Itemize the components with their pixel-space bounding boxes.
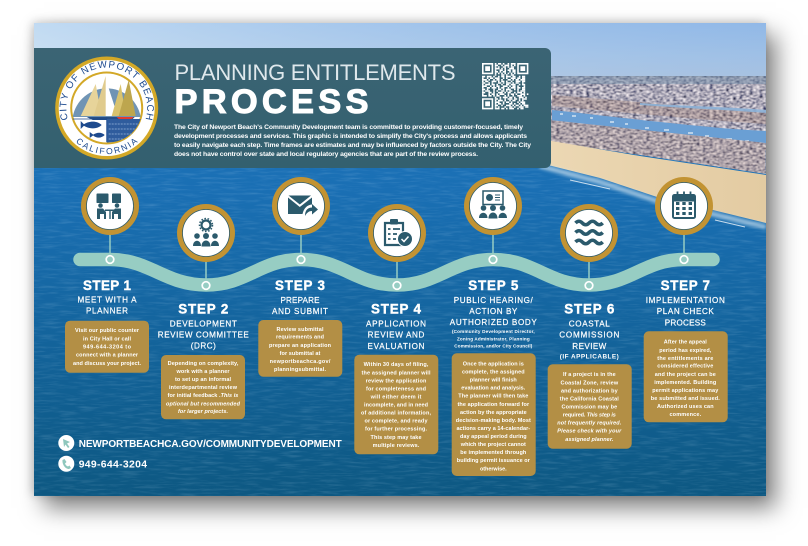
icon: calendar (672, 192, 696, 219)
step 5 description box: action by the appropriate (460, 410, 527, 416)
step 6 heading: COASTAL (569, 320, 610, 329)
step 5 description box: Once the application is (463, 362, 524, 368)
step 7 description box: commence. (669, 412, 702, 418)
step 5 description box: actions carry a 14-calendar- (456, 426, 530, 432)
header panel (34, 48, 551, 168)
step 4 description box: review the application (366, 378, 427, 384)
step 5 description box: evaluation and analysis. (461, 386, 526, 392)
background aerial photo (34, 23, 766, 496)
step 7 description box: After the appeal (664, 340, 707, 346)
step 7 description box: be submitted and issued. (651, 396, 720, 402)
step 5 heading (450, 278, 537, 349)
step 3 description box: prepare an application (269, 343, 332, 349)
website contact: NEWPORTBEACHCA.GOV/COMMUNITYDEVELOPMENT (79, 439, 342, 450)
title (174, 60, 456, 121)
step 1 description box: in City Hall or call (83, 336, 131, 342)
step 7 heading: STEP 7 (661, 278, 710, 293)
step 4 heading: APPLICATION (366, 320, 426, 329)
step 4 description box: the assigned planner will (362, 370, 431, 376)
step 3 heading: STEP 3 (275, 278, 325, 293)
title: PROCESS (174, 83, 368, 121)
step 5 description box: complete, the assigned (462, 370, 525, 376)
step 7 description box: the entitlements are (657, 356, 713, 362)
step 4 description box: will either deem it (370, 394, 422, 400)
step 4 description box: or complete, and ready (364, 418, 428, 424)
step 6 description box: not frequently required. (557, 420, 622, 426)
step 7 description box: considered effective (657, 364, 713, 370)
step 5 heading: AUTHORIZED BODY (450, 318, 537, 327)
seal lettering: CITY OF NEWPORT BEACH (60, 60, 154, 120)
step 2 description box: work with a planner (176, 369, 230, 375)
step 7 heading: PLAN CHECK (657, 307, 714, 316)
step 4 description box: incomplete, and in need (364, 402, 428, 408)
step 1 heading: STEP 1 (83, 278, 132, 293)
website contact (58, 435, 342, 451)
step 1 description box: Visit our public counter (75, 328, 140, 334)
step 4 description box: multiple reviews. (373, 443, 420, 449)
step 5 marker (464, 177, 522, 263)
step 2 description box: to set up an informal (175, 377, 231, 383)
step 3 heading: PREPARE (280, 296, 320, 305)
city seal logo (55, 56, 158, 160)
step 2 heading: DEVELOPMENT (170, 320, 237, 329)
step 4 heading: STEP 4 (371, 301, 422, 316)
step 4 description box: This step may take (370, 435, 422, 441)
QR code (482, 64, 528, 109)
step 1 description box: and discuss your project. (73, 361, 141, 367)
step 3 description box: newportbeachca.gov/ (270, 359, 331, 365)
step 6 description box: and authorization by (561, 388, 619, 394)
infographic poster (34, 23, 766, 496)
step 6 description box: If a project is in the (563, 372, 616, 378)
step 4 heading: REVIEW AND (368, 331, 424, 340)
step 5 heading: Commission, and/or City Council) (454, 344, 533, 349)
seal lettering (60, 60, 154, 154)
step 3 description box: planningsubmittal. (274, 367, 326, 373)
step 4 description box: for completeness and (366, 386, 426, 392)
step 7 marker (655, 177, 713, 263)
step 5 description box: The planner will then take (458, 394, 528, 400)
step 1 marker (81, 177, 139, 263)
step 6 heading (559, 301, 619, 360)
step 6 description box: required. This step is (563, 412, 616, 418)
step 6 description box: Please check with your (557, 428, 622, 434)
step 5 description box: be implemented through (460, 450, 527, 456)
step 6 description box: Coastal Zone, review (560, 380, 619, 386)
step 4 description box: for further processing. (365, 426, 427, 432)
step 5 heading: Zoning Administrator, Planning (457, 337, 530, 342)
seal lettering: CALIFORNIA (76, 138, 138, 154)
wave timeline path (80, 260, 713, 285)
icon: clipboard with check badge (385, 219, 412, 246)
step 6 marker (560, 204, 618, 289)
step 7 heading (646, 278, 725, 328)
step 6 description box: assigned planner. (565, 437, 614, 443)
step 3 description box: requirements and (276, 334, 324, 340)
icon: meeting at a table (96, 194, 121, 219)
step 2 heading (158, 301, 249, 351)
step 5 description box: decision-making body. Most (456, 418, 531, 424)
step 1 description box: 949-644-3204 to (83, 344, 132, 350)
step 3 heading: AND SUBMIT (272, 307, 328, 316)
step 2 description box: optional but recommended (166, 402, 241, 408)
step 1 heading: PLANNER (86, 306, 128, 315)
step 4 heading: EVALUATION (368, 342, 425, 351)
step 7 description box: and the project can be (655, 372, 716, 378)
phone contact: 949-644-3204 (79, 459, 147, 470)
step 2 description box: for larger projects. (178, 409, 228, 415)
step 5 description box (452, 353, 536, 476)
step 3 description box: for submittal at (280, 351, 321, 357)
step 6 heading: (IF APPLICABLE) (560, 354, 619, 360)
icon: waves (576, 221, 603, 244)
step 5 description box: building permit issuance or (457, 458, 531, 464)
step 7 description box: permit applications may (652, 388, 719, 394)
step 3 marker (272, 177, 330, 263)
step 2 marker (177, 204, 235, 289)
step 1 heading (78, 278, 137, 315)
step 5 heading: (Community Development Director, (452, 329, 535, 334)
step 5 heading: STEP 5 (468, 278, 519, 293)
step 2 description box: Depending on complexity, (168, 361, 239, 367)
intro text block: development processes and services. This graphic is intended to simplify the City's process and allows applicants (174, 133, 527, 140)
step 3 description box: Review submittal (276, 327, 324, 333)
step 2 description box (161, 355, 245, 419)
step 1 heading: MEET WITH A (78, 296, 137, 305)
step 5 description box: day appeal period during (460, 434, 527, 440)
step 5 description box: which the project cannot (460, 442, 526, 448)
step 6 heading: COMMISSION (559, 331, 619, 340)
step 6 description box: the California Coastal (560, 396, 619, 402)
step 6 heading: STEP 6 (564, 301, 614, 316)
step 2 heading: REVIEW COMMITTEE (158, 330, 249, 339)
step 4 description box: of additional information, (361, 410, 431, 416)
step 7 description box: period has expired, (659, 348, 712, 354)
intro text block: The City of Newport Beach's Community Development team is committed to providing customer-focused, timely (174, 124, 523, 131)
step 5 heading: PUBLIC HEARING/ (454, 296, 534, 305)
step 6 description box: Commission may be (561, 404, 617, 410)
step 5 description box: otherwise. (480, 466, 507, 472)
step 3 description box (258, 320, 342, 377)
step 5 heading: ACTION BY (469, 307, 518, 316)
step 7 description box: Authorized uses can (657, 404, 714, 410)
step 4 description box (354, 355, 438, 454)
title: PLANNING ENTITLEMENTS (174, 60, 456, 85)
step 4 marker (368, 204, 426, 289)
step 7 heading: IMPLEMENTATION (646, 296, 725, 305)
step 1 description box: connect with a planner (76, 352, 139, 358)
phone contact (58, 456, 147, 472)
step 6 description box (548, 364, 632, 449)
icon: presentation audience (479, 191, 507, 218)
step 4 heading (366, 301, 426, 351)
step 5 description box: the application forward for (457, 402, 530, 408)
step 7 description box (644, 331, 728, 422)
step 1 description box (65, 321, 149, 373)
icon: gear over team (193, 218, 219, 246)
poster shadow (34, 23, 766, 496)
step 2 heading: STEP 2 (178, 301, 228, 316)
step 7 heading: PROCESS (665, 318, 706, 328)
intro text block (174, 124, 531, 158)
step 6 heading: REVIEW (572, 342, 607, 351)
intro text block: does not have control over state and local regulatory agencies that are part of the review process. (174, 151, 478, 158)
step 2 description box: for initial feedback .This is (168, 393, 238, 399)
step 5 description box: planner will finish (470, 378, 517, 384)
intro text block: to easily navigate each step. Time frames are estimates and may be influenced by factors outside the City. The City (174, 142, 531, 149)
icon: envelope with arrow (288, 196, 318, 216)
step 3 heading (272, 278, 328, 316)
step 7 description box: implemented. Building (654, 380, 716, 386)
step 2 description box: interdepartmental review (169, 385, 238, 391)
step 4 description box: Within 30 days of filing, (364, 362, 429, 368)
step 2 heading: (DRC) (191, 342, 216, 351)
